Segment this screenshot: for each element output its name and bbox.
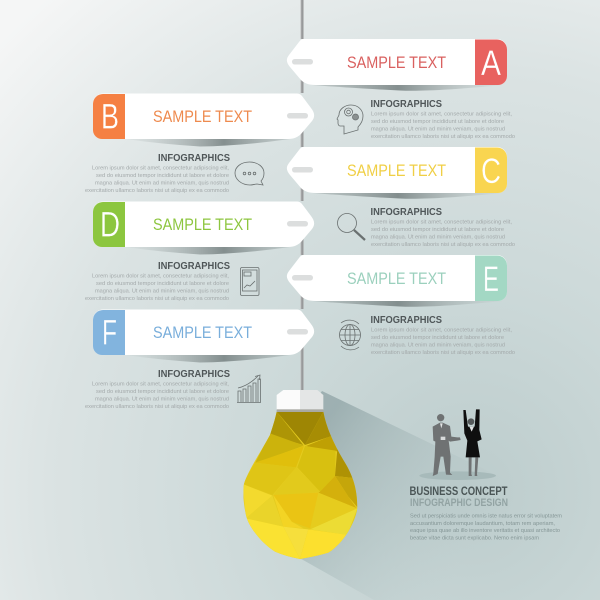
lightbulb xyxy=(240,390,360,560)
text block A xyxy=(370,99,515,140)
business concept heading: BUSINESS CONCEPT xyxy=(410,486,508,498)
text block D: sed do eiusmod tempor incididunt ut labore et dolore xyxy=(96,281,229,287)
text block F: exercitation ullamco laboris nisi ut aliquip ex ea commodo xyxy=(85,404,229,410)
business concept paragraph: beatae vitae dicta sunt explicabo. Nemo enim ipsam xyxy=(410,536,539,542)
tag F xyxy=(93,310,314,362)
text block F xyxy=(85,369,230,410)
tag D xyxy=(93,202,314,254)
tag E: E xyxy=(483,260,499,299)
woman xyxy=(463,409,482,476)
tag B: SAMPLE TEXT xyxy=(153,108,252,126)
text block C: Lorem ipsum dolor sit amet, consectetur adipiscing elit, xyxy=(371,220,512,226)
tag B xyxy=(93,93,314,146)
man xyxy=(433,414,461,476)
tag C: SAMPLE TEXT xyxy=(347,162,446,180)
bulb facets xyxy=(240,410,360,560)
text block D xyxy=(85,261,230,302)
business concept heading: INFOGRAPHIC DESIGN xyxy=(410,497,508,509)
business concept paragraph xyxy=(410,514,562,542)
icon: tablet with chart xyxy=(240,268,259,296)
tag A: A xyxy=(481,44,502,83)
tag A xyxy=(287,39,507,91)
text block A: Lorem ipsum dolor sit amet, consectetur adipiscing elit, xyxy=(371,112,512,118)
text block B: Lorem ipsum dolor sit amet, consectetur adipiscing elit, xyxy=(92,166,229,172)
text block B: exercitation ullamco laboris nisi ut aliquip ex ea commodo xyxy=(85,188,229,194)
ground ellipse xyxy=(419,471,496,480)
tag E xyxy=(287,255,507,307)
text block C: sed do eiusmod tempor incididunt ut labore et dolore xyxy=(371,227,504,233)
tag A: SAMPLE TEXT xyxy=(347,54,446,72)
text block D: exercitation ullamco laboris nisi ut aliquip ex ea commodo xyxy=(85,296,229,302)
text block D: magna aliqua. Ut enim ad minim veniam, quis nostrud xyxy=(95,288,229,294)
text block B: INFOGRAPHICS xyxy=(158,153,230,164)
icon: globe with arrows xyxy=(340,320,360,350)
text block A: magna aliqua. Ut enim ad minim veniam, quis nostrud xyxy=(371,126,505,132)
text block F: sed do eiusmod tempor incididunt ut labore et dolore xyxy=(96,389,229,395)
tag B: B xyxy=(101,98,119,136)
text block D: Lorem ipsum dolor sit amet, consectetur adipiscing elit, xyxy=(92,274,229,280)
tag E: SAMPLE TEXT xyxy=(347,270,446,288)
icon: magnifier xyxy=(338,214,365,240)
business concept heading xyxy=(410,486,508,509)
text block B: sed do eiusmod tempor incididunt ut labore et dolore xyxy=(96,173,229,179)
text block A: INFOGRAPHICS xyxy=(370,99,442,110)
text block C: INFOGRAPHICS xyxy=(370,207,442,218)
text block B xyxy=(85,153,230,194)
text block E: exercitation ullamco laboris nisi ut aliquip ex ea commodo xyxy=(371,350,515,356)
text block E: INFOGRAPHICS xyxy=(370,315,442,326)
tag C xyxy=(287,147,507,199)
icon: speech bubble xyxy=(235,162,264,185)
text block F: Lorem ipsum dolor sit amet, consectetur adipiscing elit, xyxy=(92,382,229,388)
text block E: Lorem ipsum dolor sit amet, consectetur adipiscing elit, xyxy=(371,328,512,334)
text block C xyxy=(370,207,515,248)
text block C: exercitation ullamco laboris nisi ut aliquip ex ea commodo xyxy=(371,242,515,248)
text block A: sed do eiusmod tempor incididunt ut labore et dolore xyxy=(371,119,504,125)
text block B: magna aliqua. Ut enim ad minim veniam, quis nostrud xyxy=(95,180,229,186)
business people xyxy=(419,409,496,480)
business concept paragraph: eaque ipsa quae ab illo inventore veritatis et quasi architecto xyxy=(410,528,560,534)
text block A: exercitation ullamco laboris nisi ut aliquip ex ea commodo xyxy=(371,134,515,140)
icon: head with gears xyxy=(337,105,363,134)
icon: growth chart xyxy=(237,375,261,402)
bulb cap xyxy=(277,390,323,412)
tag C: C xyxy=(481,152,501,191)
text block D: INFOGRAPHICS xyxy=(158,261,230,272)
text block F: INFOGRAPHICS xyxy=(158,369,230,380)
long shadow of the bulb xyxy=(250,391,600,600)
pole xyxy=(300,0,304,392)
tag D: D xyxy=(100,206,120,244)
tag D: SAMPLE TEXT xyxy=(153,216,252,234)
tag F: SAMPLE TEXT xyxy=(153,324,252,342)
business concept paragraph: Sed ut perspiciatis unde omnis iste natus error sit voluptatem xyxy=(410,514,562,520)
business concept paragraph: accusantium doloremque laudantium, totam rem aperiam, xyxy=(410,521,555,527)
text block E: sed do eiusmod tempor incididunt ut labore et dolore xyxy=(371,335,504,341)
tag F: F xyxy=(102,314,117,352)
text block E xyxy=(370,315,515,356)
text block E: magna aliqua. Ut enim ad minim veniam, quis nostrud xyxy=(371,342,505,348)
text block C: magna aliqua. Ut enim ad minim veniam, quis nostrud xyxy=(371,234,505,240)
text block F: magna aliqua. Ut enim ad minim veniam, quis nostrud xyxy=(95,396,229,402)
